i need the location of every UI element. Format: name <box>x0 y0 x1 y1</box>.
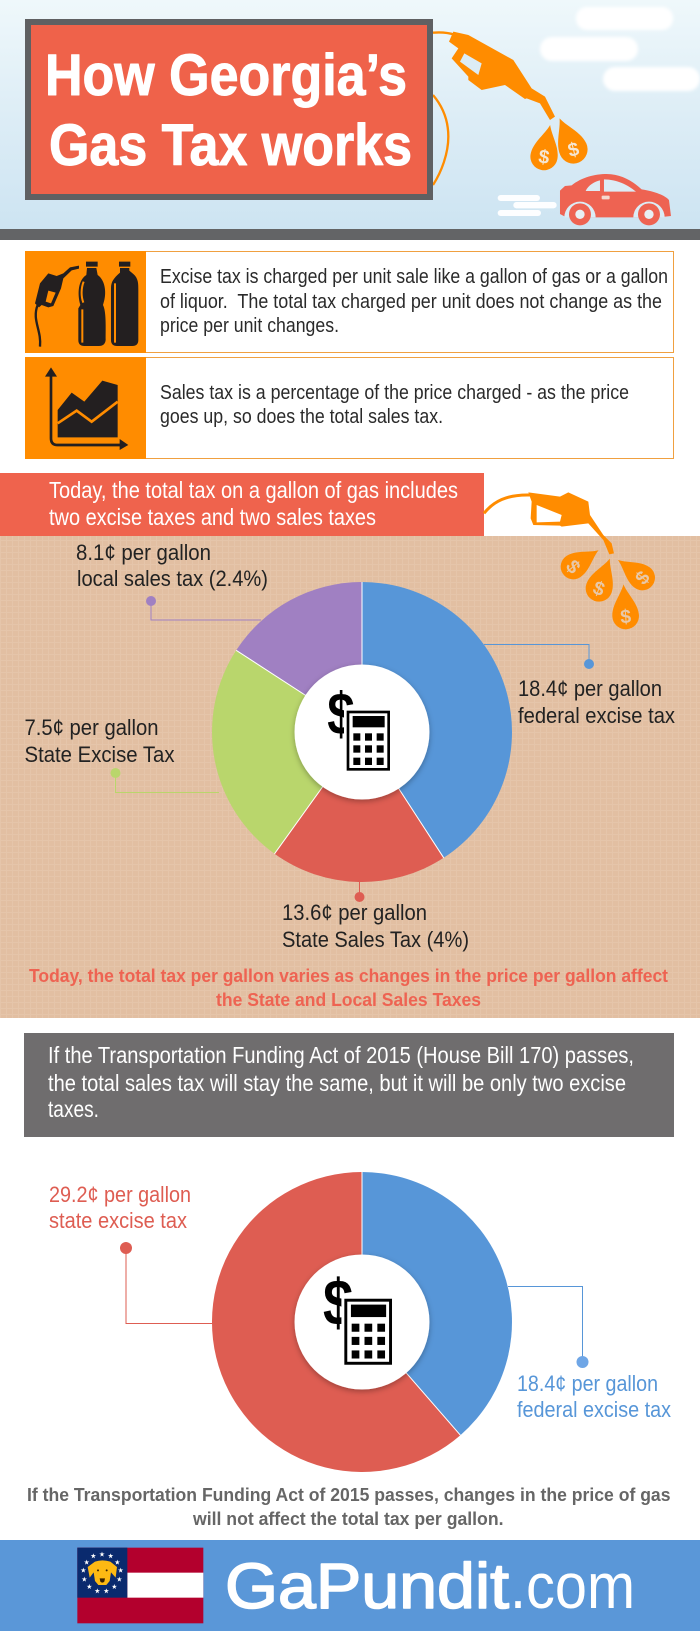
brand wordmark <box>225 1550 635 1622</box>
clouds <box>540 7 700 91</box>
title <box>45 43 412 178</box>
icon: fuel nozzle with dollar drops: $ <box>566 139 582 162</box>
panel: proposed act banner: the total sales tax will stay the same, but it will be only two excise <box>48 1070 626 1096</box>
icon: dollar calculator <box>327 681 393 773</box>
chart: proposed tax donut <box>212 1172 512 1472</box>
slice: state excise <box>212 650 362 854</box>
panel: today's tax <box>0 473 700 1018</box>
excise tax text: price per unit changes. <box>160 315 339 337</box>
donut hole <box>294 664 430 800</box>
slice: state excise <box>212 1172 460 1472</box>
sales tax text <box>160 382 629 428</box>
callout: local sales tax: 8.1¢ per gallon <box>76 540 211 565</box>
callout: federal excise tax: 18.4¢ per gallon <box>518 676 662 701</box>
callout: local sales tax: local sales tax (2.4%) <box>77 566 268 591</box>
icon: dollar calculator <box>323 1266 395 1368</box>
takeaway text: proposed <box>27 1484 670 1529</box>
takeaway text: today: the State and Local Sales Taxes <box>216 989 481 1010</box>
icon: rising chart <box>45 367 128 450</box>
panel: footer <box>0 1540 700 1631</box>
panel: proposed act banner <box>24 1033 674 1137</box>
takeaway text: proposed: will not affect the total tax per gallon. <box>192 1508 504 1529</box>
icon: dollar calculator: $ <box>323 1266 353 1339</box>
icon: fuel nozzle and bottles <box>35 262 138 347</box>
panel: sales tax definition <box>25 357 674 459</box>
takeaway text: proposed: If the Transportation Funding Act of 2015 passes, changes in the price of gas <box>27 1484 670 1505</box>
callout: local sales tax <box>76 540 268 620</box>
callout: proposed state excise tax <box>49 1182 212 1324</box>
title: How Georgia’s <box>45 43 407 108</box>
callout: proposed state excise tax: state excise tax <box>49 1208 187 1233</box>
icon: car with speed lines <box>498 174 671 225</box>
slice: local sales <box>236 582 362 732</box>
sales tax text: Sales tax is a percentage of the price charged - as the price <box>160 382 629 404</box>
panel: proposed act banner: If the Transportation Funding Act of 2015 (House Bill 170) passes, <box>48 1042 634 1068</box>
takeaway text: today <box>29 965 668 1010</box>
icon: fuel nozzle with four dollar drops: $ <box>590 578 607 601</box>
icon: fuel nozzle with four dollar drops <box>484 492 660 630</box>
panel: proposed act banner: taxes. <box>48 1096 99 1122</box>
callout: proposed federal excise tax: 18.4¢ per gallon <box>517 1371 658 1396</box>
panel: excise tax definition <box>25 251 674 353</box>
callout: federal excise tax <box>484 644 675 728</box>
title box <box>28 22 430 197</box>
brand wordmark: .com <box>510 1550 635 1622</box>
donut hole <box>294 1254 430 1390</box>
sales tax text: goes up, so does the total sales tax. <box>160 406 443 428</box>
icon: fuel nozzle with four dollar drops: $ <box>561 557 584 578</box>
tan textured background <box>0 536 700 1018</box>
callout: proposed state excise tax: 29.2¢ per gallon <box>49 1182 191 1207</box>
slice: federal excise <box>362 582 512 858</box>
callout: state excise tax <box>24 715 219 792</box>
icon: fuel nozzle with four dollar drops: $ <box>632 567 655 589</box>
callout: state sales tax: 13.6¢ per gallon <box>282 900 427 925</box>
icon: Georgia flag with dog <box>77 1548 203 1623</box>
takeaway text: today: Today, the total tax per gallon varies as changes in the price per gallon affect <box>29 965 668 986</box>
panel: header <box>0 0 700 240</box>
chart: current tax donut <box>212 582 512 882</box>
icon: fuel nozzle with dollar drops <box>433 32 592 185</box>
icon: dollar calculator: $ <box>327 681 355 747</box>
heading banner: Today, the total tax on a gallon of gas includes <box>49 477 458 503</box>
title: Gas Tax works <box>49 113 412 178</box>
excise tax text <box>160 266 668 337</box>
callout: state sales tax: State Sales Tax (4%) <box>282 927 469 952</box>
heading banner: two excise taxes and two sales taxes <box>49 504 376 530</box>
heading banner <box>0 473 484 536</box>
icon: fuel nozzle with four dollar drops: $ <box>620 607 632 628</box>
callout: state excise tax: State Excise Tax <box>24 742 174 767</box>
callout: proposed federal excise tax <box>508 1286 671 1422</box>
callout: proposed federal excise tax: federal excise tax <box>517 1397 671 1422</box>
sky background <box>0 0 700 229</box>
callout: state excise tax: 7.5¢ per gallon <box>24 715 158 740</box>
brand wordmark: GaPundit <box>225 1550 509 1622</box>
slice: state sales <box>274 732 444 882</box>
icon: fuel nozzle with dollar drops: $ <box>537 147 551 169</box>
callout: state sales tax <box>282 882 469 952</box>
callout: federal excise tax: federal excise tax <box>518 703 675 728</box>
divider bar <box>0 229 700 240</box>
slice: federal excise <box>362 1172 512 1435</box>
